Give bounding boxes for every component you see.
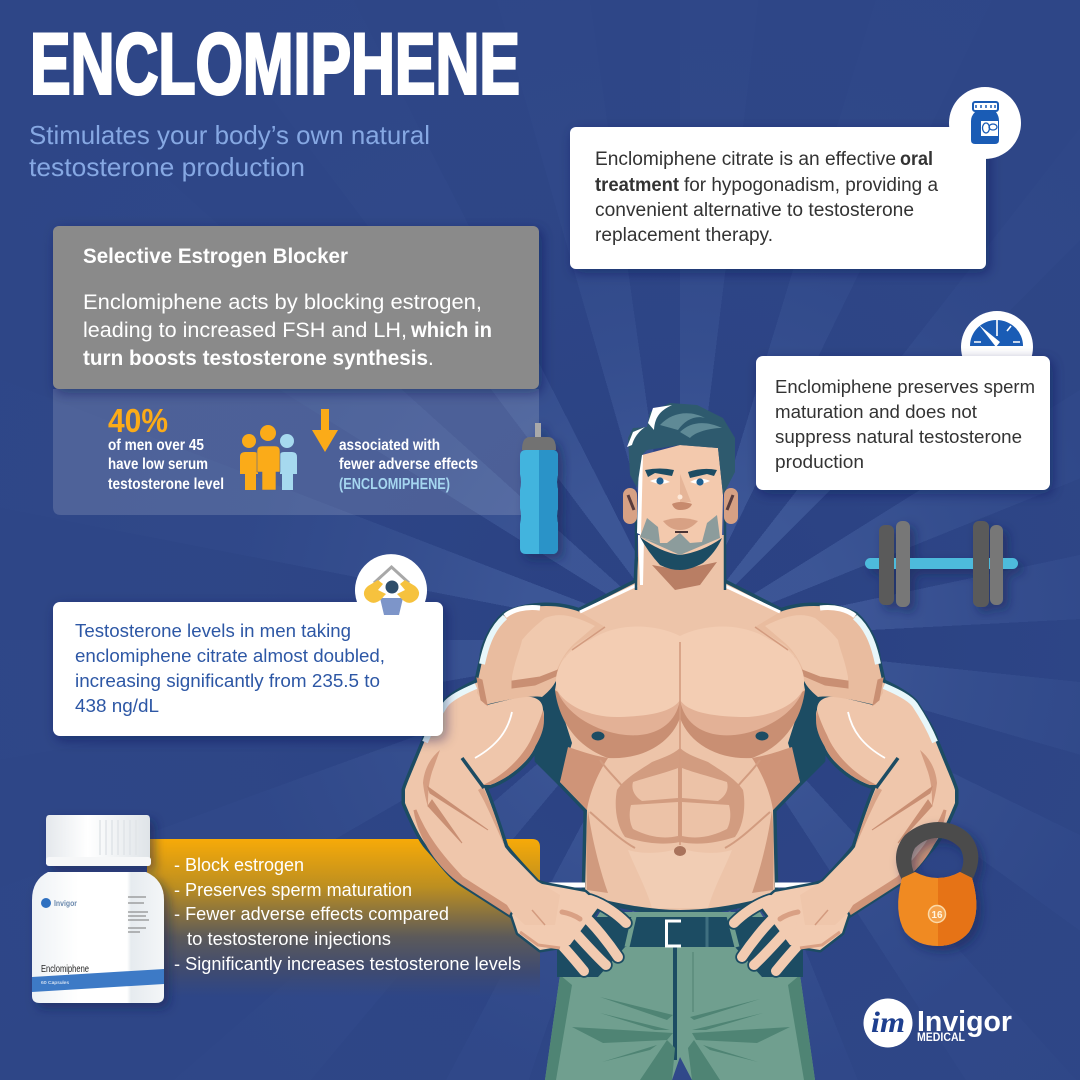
- card text: suppress natural testosterone: [775, 426, 1022, 447]
- stat description: of men over 45: [108, 437, 204, 454]
- card text: Enclomiphene preserves sperm: [775, 376, 1035, 397]
- card text: Enclomiphene citrate is an effective: [595, 149, 896, 170]
- logo: Invigor Medical: [864, 998, 1012, 1048]
- icon: people: [240, 425, 297, 490]
- card text: maturation and does not: [775, 401, 977, 422]
- panel: statistics: [53, 389, 539, 515]
- icon: gauge circle: [961, 311, 1033, 383]
- panel: sperm maturation card: [756, 356, 1050, 490]
- head: [623, 403, 738, 610]
- card text: production: [775, 451, 864, 472]
- card text: [595, 149, 938, 246]
- stat: 40 percent: 40%: [108, 402, 168, 439]
- panel: selective estrogen blocker: [53, 226, 539, 389]
- card text: replacement therapy.: [595, 225, 773, 246]
- icon: dumbbell: [865, 521, 1018, 607]
- stat description: [108, 437, 224, 493]
- illustration: product bottle: [32, 815, 164, 1003]
- subtitle: testosterone production: [29, 152, 305, 182]
- bottle label: Enclomiphene: [41, 963, 89, 975]
- bottle label: Invigor: [54, 899, 77, 908]
- panel heading: Selective Estrogen Blocker: [83, 245, 348, 268]
- card text: 438 ng/dL: [75, 695, 159, 716]
- adverse effects text: (ENCLOMIPHENE): [339, 476, 450, 493]
- subtitle: [29, 120, 430, 182]
- belt: [557, 895, 803, 977]
- illustration: muscular man: [405, 403, 955, 1080]
- benefits list text: - Preserves sperm maturation: [174, 879, 412, 900]
- pants: [545, 912, 815, 1080]
- panel body text: .: [428, 347, 434, 370]
- card text: Testosterone levels in men taking: [75, 620, 351, 641]
- torso and arms: [405, 560, 955, 915]
- panel body text: leading to increased FSH and LH,: [83, 319, 407, 342]
- bottle label: 60 Capsules: [41, 980, 70, 985]
- panel: oral treatment card: [570, 127, 986, 269]
- card text: enclomiphene citrate almost doubled,: [75, 645, 385, 666]
- panel: testosterone levels card: [53, 602, 443, 736]
- benefits list text: - Block estrogen: [174, 854, 304, 875]
- card text: for hypogonadism, providing a: [684, 175, 938, 196]
- icon: kettlebell: [896, 822, 978, 946]
- adverse effects text: [339, 437, 478, 493]
- panel body text: [83, 291, 492, 370]
- bottle body: [32, 872, 164, 1003]
- card text: [775, 376, 1035, 472]
- benefits list text: - Fewer adverse effects compared: [174, 903, 449, 924]
- bottle label: [32, 897, 164, 992]
- neck: [636, 510, 725, 610]
- icon: flexing figure: [355, 554, 427, 615]
- card text: oral: [900, 149, 933, 170]
- main title: ENCLOMIPHENE: [30, 16, 520, 112]
- bottle cap: [46, 815, 151, 866]
- subtitle: Stimulates your body’s own natural: [29, 120, 430, 150]
- stat description: have low serum: [108, 456, 208, 473]
- benefits list text: [174, 854, 521, 974]
- card text: increasing significantly from 235.5 to: [75, 670, 380, 691]
- adverse effects text: associated with: [339, 437, 440, 454]
- adverse effects text: fewer adverse effects: [339, 456, 478, 473]
- panel body text: Enclomiphene acts by blocking estrogen,: [83, 291, 482, 314]
- card text: treatment: [595, 175, 680, 196]
- panel body text: turn boosts testosterone synthesis: [83, 347, 428, 370]
- hands: [480, 848, 880, 971]
- icon: water bottle: [520, 423, 558, 554]
- logo: Invigor Medical: Invigor: [917, 1006, 1012, 1038]
- benefits list text: to testosterone injections: [187, 928, 391, 949]
- benefits list text: - Significantly increases testosterone levels: [174, 953, 521, 974]
- icon: pill jar: [949, 87, 1021, 159]
- face features: [645, 468, 717, 532]
- logo: Invigor Medical: im: [871, 1006, 905, 1039]
- icon: kettlebell: 16: [932, 910, 943, 921]
- stat description: testosterone level: [108, 476, 224, 493]
- panel body text: which in: [410, 319, 492, 342]
- panel: benefits list: [147, 839, 540, 997]
- logo: Invigor Medical: MEDICAL: [917, 1030, 965, 1044]
- icon: gauge: [970, 320, 1023, 347]
- icon: down arrow: [312, 409, 338, 452]
- card text: [75, 620, 385, 716]
- card text: convenient alternative to testosterone: [595, 200, 914, 221]
